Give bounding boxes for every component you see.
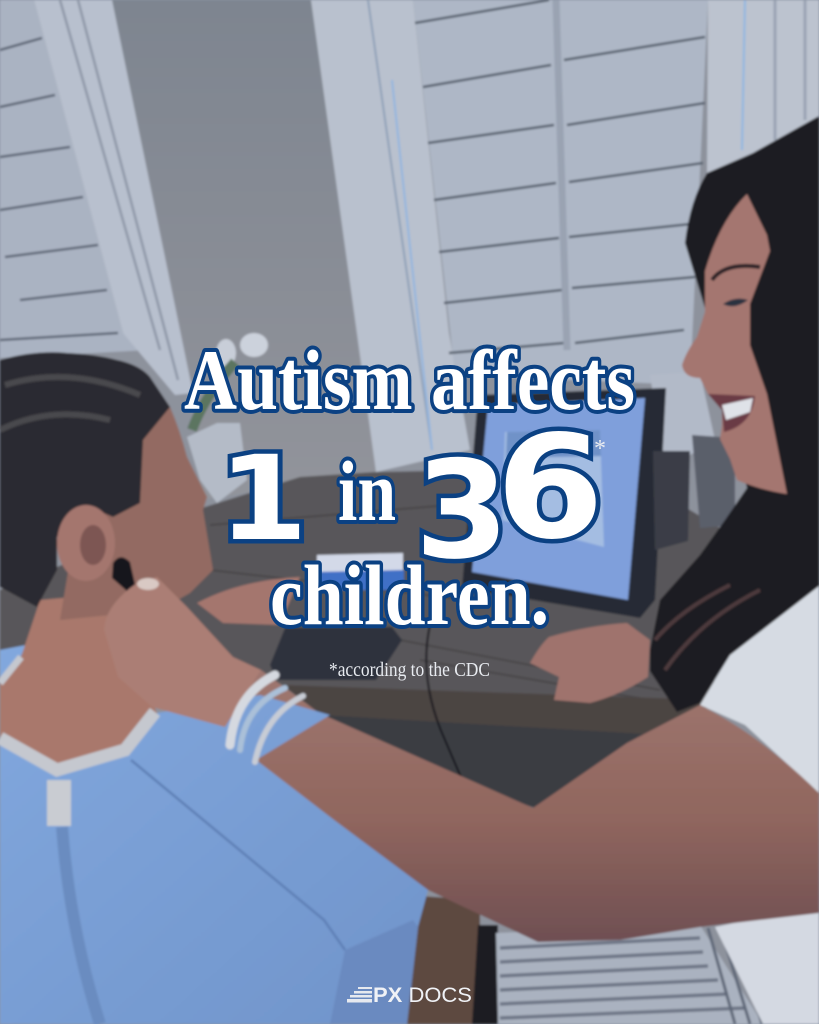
striped clothing [496, 924, 763, 1024]
right window blinds [413, 0, 819, 470]
lower wood and dark gap [400, 895, 480, 1024]
large numeral 1: 1 [218, 430, 308, 567]
large numeral 3: 3 [415, 432, 509, 589]
word: in: in [338, 443, 396, 539]
large numeral 6: 6 [496, 404, 604, 571]
woman's hand at ear [104, 577, 261, 727]
woman's arm [225, 670, 819, 942]
right window frame [311, 0, 470, 472]
device at ear [112, 557, 137, 593]
logo icon: stacked bars [347, 987, 372, 1002]
headline line: children.: children. [270, 547, 549, 643]
woman's shirt [700, 586, 819, 793]
footnote: *according to the CDC [329, 659, 490, 681]
boy's hair [0, 352, 170, 607]
tablet [462, 388, 735, 618]
table front edge and shadow [282, 685, 710, 738]
eyebrow and eye [712, 266, 760, 280]
headline [184, 332, 635, 643]
woman's face [682, 194, 787, 494]
keypad device [270, 553, 404, 680]
headline line: Autism affects: Autism affects [184, 332, 635, 428]
left window blinds [0, 0, 193, 395]
boy's face [60, 380, 213, 620]
asterisk: * [594, 436, 606, 462]
wall [112, 0, 376, 500]
table [0, 470, 740, 707]
hair lower strands [655, 585, 760, 670]
woman's hair back [650, 116, 819, 712]
mouth [708, 394, 755, 432]
bracelets [230, 675, 303, 762]
boy's shirt [0, 645, 428, 1024]
cable [426, 625, 475, 810]
flower pot [187, 333, 268, 503]
logo wordmark: PX DOCS [373, 984, 472, 1007]
boy's back and neck [0, 590, 157, 773]
boy's arm [197, 577, 300, 625]
boy's ear [57, 505, 115, 581]
woman's hand on table [530, 623, 650, 703]
thumbnail [137, 578, 159, 590]
logo: PX DOCS [347, 984, 472, 1007]
